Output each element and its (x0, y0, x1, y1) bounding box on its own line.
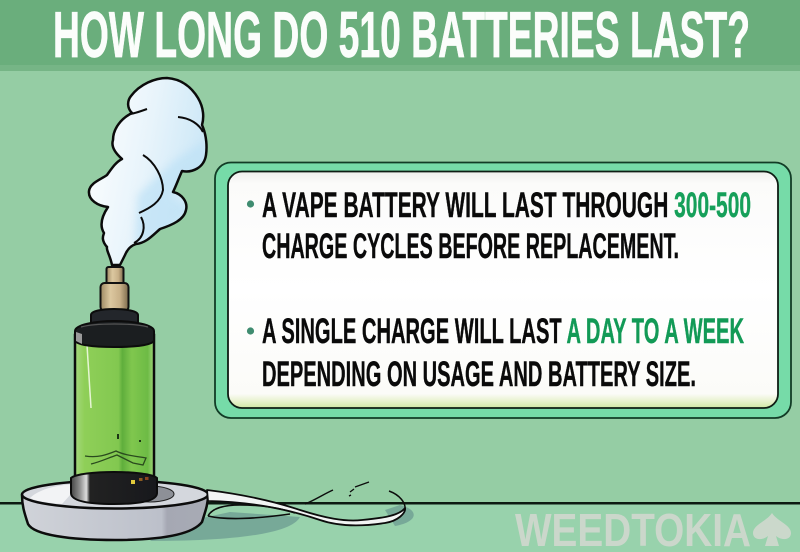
LEDs (131, 480, 135, 484)
black neck (91, 309, 138, 325)
fact: charge cycles (247, 186, 751, 266)
floor line (0, 502, 800, 504)
title banner (0, 0, 800, 71)
top cap (75, 321, 154, 347)
icon: 510 vape battery (71, 267, 157, 504)
panel: battery facts (215, 162, 791, 418)
liquid marks (85, 451, 146, 465)
brass tip (106, 267, 124, 284)
shadow under charger (150, 505, 414, 541)
icon: spade (753, 513, 791, 546)
fact: single charge (247, 312, 744, 394)
glass tank (75, 335, 154, 480)
bottom ring (71, 472, 157, 504)
icon: smoke cloud (89, 78, 207, 265)
icon: charging cord (207, 482, 405, 525)
icon: charging base (22, 480, 208, 540)
